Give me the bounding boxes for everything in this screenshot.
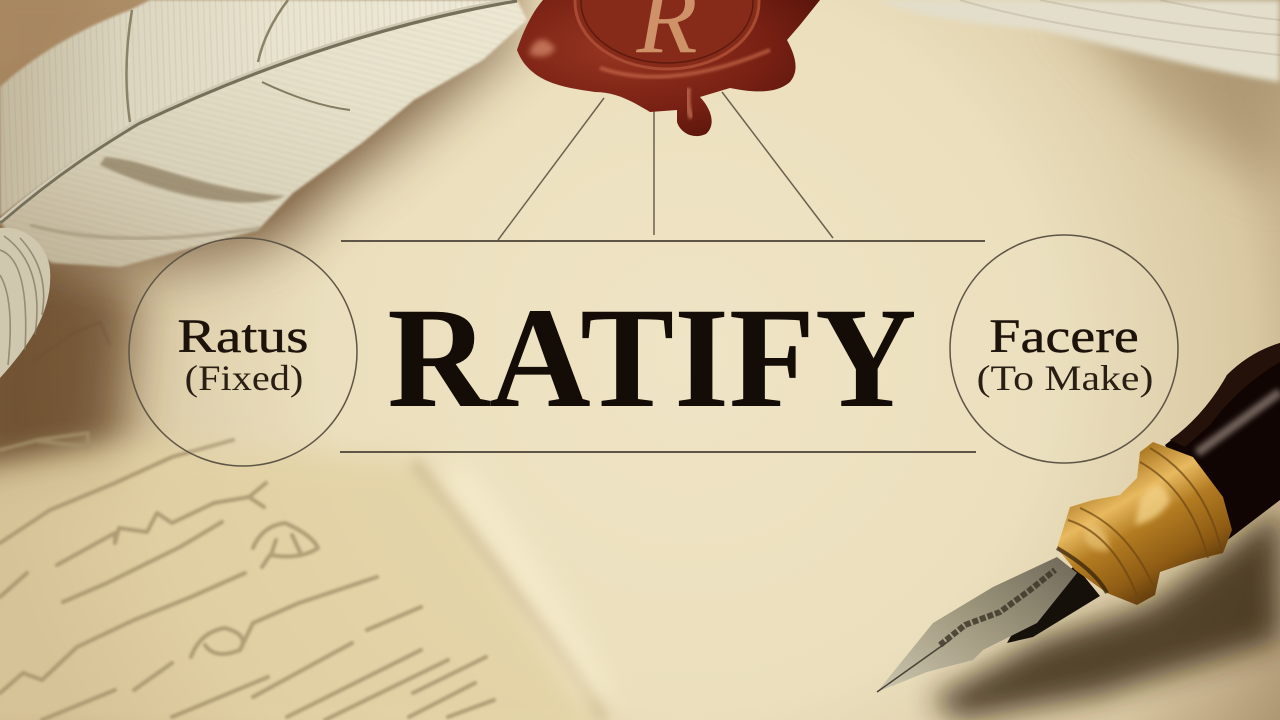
pen barrel [1165, 343, 1280, 542]
right circle: Facere: Facere [989, 310, 1139, 363]
pen nib [877, 557, 1077, 692]
feather tuft [0, 228, 50, 378]
right circle: Facere [950, 235, 1178, 463]
connector lines from seal [498, 92, 833, 240]
left circle: Ratus: Ratus [177, 310, 309, 363]
pen nib underside [1007, 565, 1100, 643]
feather splits [126, 0, 288, 122]
manuscript page with handwriting [0, 322, 620, 720]
icon: fountain pen [877, 343, 1280, 720]
feather upper vane [0, 0, 517, 217]
feather spine [0, 0, 517, 222]
right circle: Facere: (To Make) [977, 359, 1153, 398]
feather lower vane [0, 0, 527, 267]
icon: quill feather [0, 0, 527, 378]
title: RATIFY: RATIFY [387, 278, 917, 437]
icon: wax seal [517, 0, 820, 136]
pen shadow [930, 510, 1280, 720]
icon: second feather top right [875, 0, 1280, 82]
left circle: Ratus [129, 238, 357, 466]
title frame lines [340, 241, 985, 452]
pen gold collar [1057, 442, 1232, 605]
left circle: Ratus: (Fixed) [185, 359, 303, 398]
